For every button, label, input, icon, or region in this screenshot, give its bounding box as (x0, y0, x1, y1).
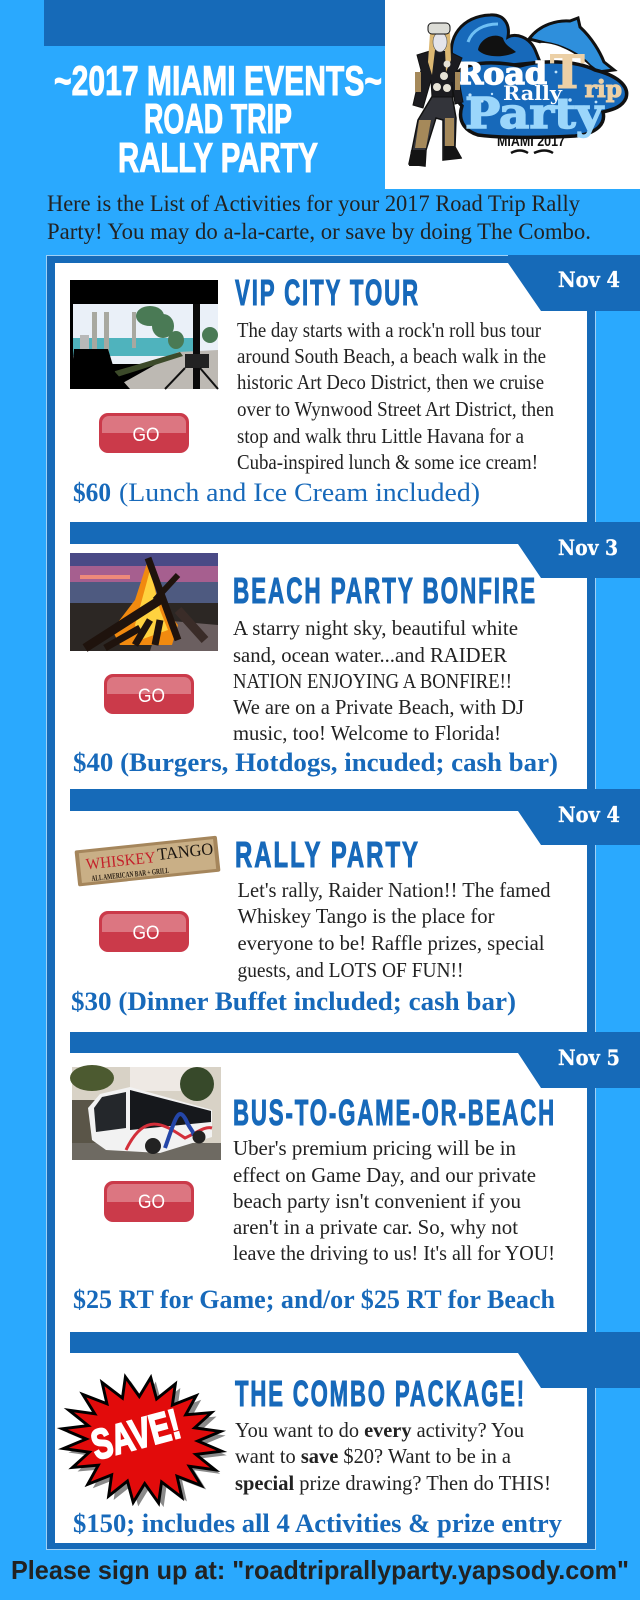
body text: special prize drawing? Then do THIS! (235, 1471, 551, 1495)
body text: You want to do every activity? You (235, 1418, 524, 1442)
body text: Cuba-inspired lunch & some ice cream! (237, 450, 538, 474)
icon: big wave (451, 15, 540, 66)
price: $150; includes all 4 Activities & prize entry (73, 1508, 562, 1538)
date band: Nov 5 (558, 1045, 620, 1070)
panel: The Combo Package (53, 1332, 640, 1538)
body text: NATION ENJOYING A BONFIRE!! (233, 669, 512, 693)
date tab: Nov 4 (558, 267, 620, 292)
title: ROAD TRIP (144, 95, 292, 142)
body text (235, 1418, 551, 1495)
logo text: road: Road (457, 57, 547, 92)
icon: SAVE starburst (53, 1366, 236, 1518)
body text: effect on Game Day, and our private (233, 1163, 536, 1187)
date band (70, 1032, 640, 1088)
footer call to action: Please sign up at: "roadtriprallyparty.yapsody.com" (11, 1555, 629, 1585)
panel: Rally Party (70, 789, 640, 1016)
button: GO: GO (132, 923, 160, 944)
header band (44, 0, 385, 46)
photo: bus window view (70, 280, 218, 389)
body text: Whiskey Tango is the place for (238, 904, 494, 928)
body text (233, 616, 524, 745)
body text: leave the driving to us! It's all for YOU! (233, 1241, 555, 1265)
body text: The day starts with a rock'n roll bus tour (237, 318, 541, 342)
photo: bonfire (70, 553, 218, 651)
intro text: Party! You may do a-la-carte, or save by doing The Combo. (47, 219, 591, 244)
body text (237, 318, 554, 474)
body text (233, 1136, 555, 1265)
title: ~2017 MIAMI EVENTS~ (54, 57, 382, 104)
body text: Uber's premium pricing will be in (233, 1136, 516, 1160)
date band (70, 522, 640, 578)
date tab (508, 255, 640, 311)
heading: VIP CITY TOUR (235, 272, 420, 313)
title (54, 57, 382, 181)
photo: bus (70, 1065, 221, 1160)
date band: Nov 4 (558, 802, 620, 827)
logo text: trip: T (550, 45, 584, 99)
heading: RALLY PARTY (235, 834, 420, 875)
logo blob (455, 62, 627, 137)
body text: aren't in a private car. So, why not (233, 1215, 518, 1239)
intro text (47, 191, 591, 244)
button: GO: GO (132, 425, 160, 446)
body text: historic Art Deco District, then we cruise (237, 370, 544, 394)
button: GO (104, 1181, 194, 1222)
logo confetti dots (468, 71, 597, 109)
date band: Nov 3 (558, 535, 618, 560)
price: (Lunch and Ice Cream included) (119, 477, 480, 507)
button: GO (99, 911, 189, 952)
logo: Whiskey Tango sign (75, 836, 220, 886)
logo panel (385, 0, 640, 189)
icon: dolphin (529, 18, 614, 72)
price: $60 (73, 477, 111, 507)
logo: Whiskey Tango sign: WHISKEY (85, 849, 157, 873)
icon: moustache flourish (511, 150, 553, 153)
body text: A starry night sky, beautiful white (233, 616, 518, 640)
body text: over to Wynwood Street Art District, then (237, 397, 554, 421)
button: GO: GO (138, 1192, 165, 1213)
price: $25 RT for Game; and/or $25 RT for Beach (73, 1284, 555, 1314)
button: GO (99, 413, 189, 453)
title: RALLY PARTY (118, 134, 318, 181)
body text: Let's rally, Raider Nation!! The famed (238, 878, 551, 902)
panel: VIP City Tour (70, 255, 640, 507)
logo text: miami 2017: MIAMI 2017 (497, 133, 565, 150)
body text: want to save $20? Want to be in a (235, 1444, 512, 1468)
price: $40 (Burgers, Hotdogs, incuded; cash bar) (73, 747, 558, 777)
logo: Whiskey Tango sign: TANGO (156, 839, 214, 864)
body text: guests, and LOTS OF FUN!! (238, 958, 464, 982)
price: $30 (Dinner Buffet included; cash bar) (71, 986, 516, 1016)
icon: SAVE starburst: SAVE! (86, 1400, 185, 1469)
button: GO (104, 674, 194, 714)
panel: Beach Party Bonfire (70, 522, 640, 777)
body text: stop and walk thru Little Havana for a (237, 424, 525, 448)
body text: beach party isn't convenient if you (233, 1189, 521, 1213)
body text (238, 878, 551, 982)
body text: around South Beach, a beach walk in the (237, 344, 546, 368)
body text: everyone to be! Raffle prizes, special (238, 931, 545, 955)
icon: character (409, 23, 463, 166)
body text: We are on a Private Beach, with DJ (233, 695, 524, 719)
logo: Whiskey Tango sign: ALL AMERICAN BAR + GRILL (91, 866, 170, 883)
panel: Bus to Game or Beach (70, 1032, 640, 1314)
logo text: trip: rip (585, 76, 622, 103)
logo text: party: Party (465, 89, 605, 138)
logo text: rally: Rally (503, 81, 563, 105)
frame (46, 256, 596, 1550)
intro text: Here is the List of Activities for your 2017 Road Trip Rally (47, 191, 580, 216)
header band (70, 1332, 640, 1388)
body text: sand, ocean water...and RAIDER (233, 643, 507, 667)
button: GO: GO (138, 686, 165, 707)
date band (70, 789, 640, 845)
body text: music, too! Welcome to Florida! (233, 721, 501, 745)
